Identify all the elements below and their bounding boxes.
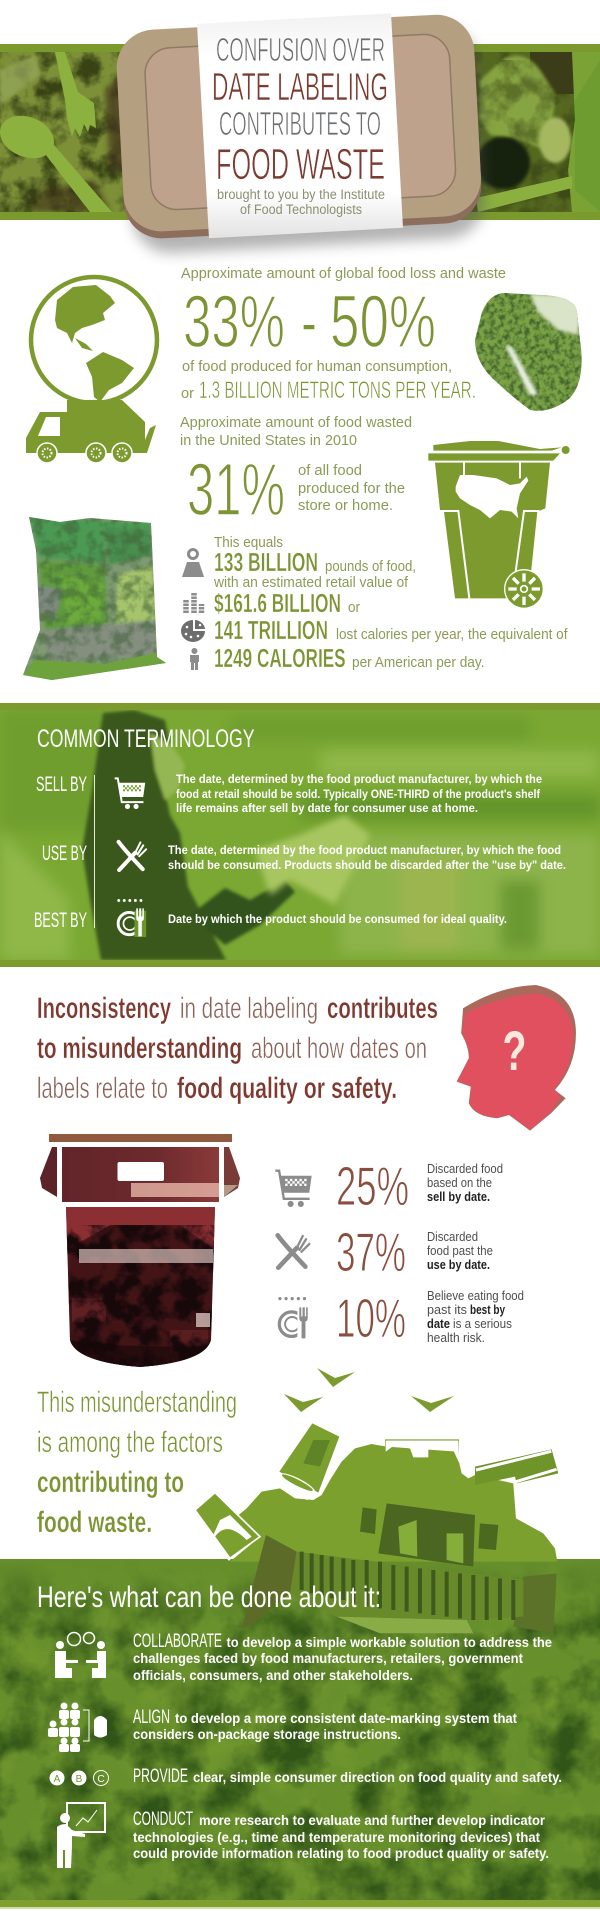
item: align: ALIGN [133,1706,170,1728]
flying cup [277,1422,341,1500]
icon: cart [275,1171,312,1207]
stat note: sell by: Discarded food [427,1162,503,1176]
icon: rated plate [117,899,146,937]
box on heap [386,1440,459,1463]
item: align: considers on-package storage instructions. [133,1727,401,1742]
heading: inconsistency statement: food quality or safety. [177,1072,397,1105]
US stat text [180,415,412,531]
item: conduct: could provide information relating to food product quality or safety. [133,1846,549,1861]
equivalents list [181,535,568,673]
icon: A B C choices: C [97,1774,105,1785]
term labels [34,773,87,932]
text: misunderstanding statement: food waste. [37,1506,152,1539]
item: collaborate: to develop a simple workable solution to address the [226,1635,552,1650]
stat: 37%: 37% [336,1221,406,1283]
photo: broccoli [475,293,582,411]
icon: coins [186,593,202,613]
equivalents list: per American per day. [352,655,484,671]
term labels: BEST BY [34,909,87,932]
best by definition: Date by which the product should be consumed for ideal quality. [168,914,507,926]
stat note: best by: past its [427,1303,467,1317]
heading: COMMON TERMINOLOGY [37,725,255,753]
photo: landfill background [0,1559,600,1900]
stat note: best by: date [427,1317,450,1331]
dozer cab and mirrors [360,1503,498,1567]
sell by definition: food at retail should be sold. Typically ONE-THIRD of the product's shelf [176,789,540,801]
stat note: sell by: based on the [427,1176,492,1190]
global stat text: Approximate amount of global food loss and waste [181,266,506,282]
sell by definition: The date, determined by the food product manufacturer, by which the [176,774,542,786]
heading: inconsistency statement [37,992,438,1105]
stat note: sell by [427,1162,503,1204]
stat: 25%: 25% [336,1155,409,1217]
icon: A B C choices: A [54,1774,61,1785]
item: align: to develop a more consistent date-marking system that [175,1711,517,1726]
subtitle [217,187,385,217]
global stat text: or [181,386,194,402]
sell by definition [176,774,542,815]
icon: knife and fork [278,1235,309,1268]
US stat text: store or home. [298,498,393,514]
US stat text: 31% [187,448,285,531]
stat note: best by: best by [470,1303,505,1317]
icon: garbage truck [26,400,156,463]
item: collaborate [133,1630,552,1683]
icon: A B C choices: B [76,1774,83,1785]
icon: trash bin with USA map [428,441,570,608]
header photo right [465,52,600,212]
item: align [133,1706,517,1742]
header photo left [0,52,135,212]
heading: inconsistency statement: in date labeling [180,992,318,1025]
stat note: use by: Discarded [427,1230,478,1244]
panel: what can be done [0,1559,600,1909]
item: collaborate: challenges faced by food manufacturers, retailers, government [133,1651,523,1666]
dozer blade [242,1535,557,1633]
text: misunderstanding statement: This misunderstanding [37,1386,237,1419]
header band [0,44,600,220]
stat note: best by: health risk. [427,1331,485,1345]
subtitle: of Food Technologists [240,202,362,217]
equivalents list: lost calories per year, the equivalent of [336,627,568,643]
heading: Here's what can be done about it: [37,1581,381,1614]
stats: consumer misunderstanding [275,1155,524,1349]
33% - 50% [183,280,436,363]
heading: inconsistency statement: contributes [327,992,438,1025]
item: conduct: more research to evaluate and further develop indicator [199,1813,546,1828]
food tray with title label [115,13,486,255]
sell by definition: life remains after sell by date for consumer use at home. [176,803,478,815]
flying can right [475,1449,558,1485]
use by definition [168,845,566,872]
text: misunderstanding statement [37,1386,237,1539]
heading: inconsistency statement: labels relate to [37,1072,168,1105]
icon: pizza [181,620,205,642]
icon: globe [31,277,157,403]
33% - 50%: 50% [330,280,436,363]
US stat text: of all food [298,463,362,479]
title: FOOD WASTE [216,140,385,189]
term labels: USE BY [42,842,87,865]
item: provide: clear, simple consumer direction on food quality and safety. [193,1770,562,1785]
use by definition: should be consumed. Products should be discarded after the "use by" date. [168,860,566,872]
stat note: best by: Believe eating food [427,1289,524,1303]
equivalents list: with an estimated retail value of [213,575,409,591]
equivalents list: or [348,600,360,616]
item: provide [133,1765,562,1787]
illustration: overflowing red trash can [40,1134,240,1367]
item: conduct: CONDUCT [133,1808,193,1830]
33% - 50%: - [301,280,317,363]
icon: presenter with chart [57,1803,105,1868]
global stat text: of food produced for human consumption, [182,359,452,375]
stat note: use by: use by date. [427,1258,490,1272]
global stat text [181,266,506,404]
title: CONFUSION OVER [216,31,385,68]
icon: group aligned around can [48,1702,107,1752]
icon: cart [115,778,145,809]
item: collaborate: COLLABORATE [133,1630,222,1652]
stat note: best by: is a serious [453,1317,512,1331]
text: misunderstanding statement: contributing to [37,1466,184,1499]
icon: rated plate [278,1297,310,1339]
title [212,31,388,189]
stat note: use by [427,1230,493,1272]
icon: head with question mark [457,985,576,1131]
item: provide: PROVIDE [133,1765,188,1787]
photo: shopper in aisle [0,710,600,960]
photo: bag of salad greens [20,515,170,685]
icon: head with question mark: ? [502,1019,526,1082]
icon: knife and fork [119,842,146,870]
US stat text: in the United States in 2010 [180,433,357,449]
subtitle: brought to you by the Institute [217,187,385,202]
item: conduct [133,1808,549,1861]
term labels: SELL BY [36,773,87,796]
icon: weight [182,548,204,577]
use by definition: The date, determined by the food product manufacturer, by which the food [168,845,561,857]
item: collaborate: officials, consumers, and other stakeholders. [133,1668,413,1683]
equivalents list: This equals [214,535,283,551]
label sleeve [197,13,403,238]
heading: inconsistency statement: to misunderstanding [37,1032,242,1065]
panel: common terminology [0,703,600,967]
illustration: bulldozer on garbage heap [195,1422,558,1633]
icon: person [190,648,199,670]
equivalents list: 1249 CALORIES [214,645,346,673]
US stat text: Approximate amount of food wasted [180,415,412,431]
heading: inconsistency statement: about how dates on [251,1032,427,1065]
title: DATE LABELING [212,66,388,109]
equivalents list: 133 BILLION [214,549,318,577]
flying can left [195,1493,260,1560]
item: conduct: technologies (e.g., time and temperature monitoring devices) that [133,1830,540,1845]
US stat text: produced for the [298,481,405,497]
action list [37,1581,562,1868]
stat: 10%: 10% [336,1287,406,1349]
title: CONTRIBUTES TO [219,105,381,142]
icon: A B C choices [50,1770,108,1786]
stat note: best by [427,1289,524,1345]
equivalents list: pounds of food, [325,559,416,575]
equivalents list: $161.6 BILLION [214,590,341,618]
icon: two people talking [55,1632,106,1678]
33% - 50%: 33% [183,280,285,363]
icons: birds [284,1368,454,1412]
stat note: use by: food past the [427,1244,493,1258]
text: misunderstanding statement: is among the factors [37,1426,223,1459]
equivalents list: 141 TRILLION [214,617,328,645]
heading: inconsistency statement: Inconsistency [37,992,171,1025]
stat note: sell by: sell by date. [427,1190,490,1204]
